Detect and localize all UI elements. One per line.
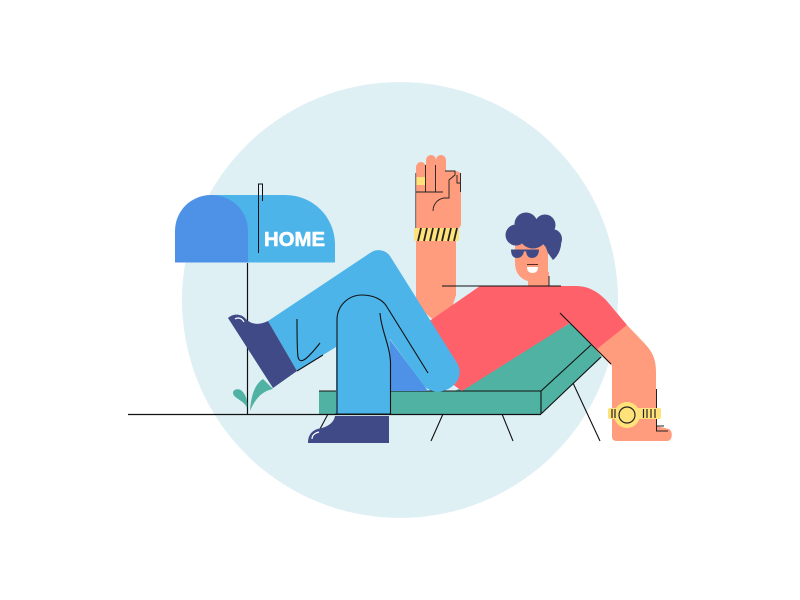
right lens [526, 250, 539, 258]
shoulder and chest lines [442, 286, 611, 364]
lounger legs [320, 383, 600, 441]
lounger side [541, 345, 602, 414]
lower shoe body [308, 416, 389, 443]
finger one [416, 162, 426, 192]
face [515, 244, 549, 281]
sunglasses [511, 250, 539, 258]
ground line [128, 414, 541, 416]
upper shoe body [228, 315, 297, 388]
wrist watch [608, 402, 661, 428]
mailbox body [211, 195, 335, 262]
lounger [319, 322, 602, 441]
mailbox door [175, 195, 248, 262]
hair [506, 212, 562, 260]
finger two [426, 155, 436, 185]
upper shoe highlight [235, 318, 244, 322]
plant [233, 379, 273, 411]
right arm skin [595, 325, 672, 441]
mailbox flag [258, 184, 262, 253]
mailbox label: HOME [264, 228, 325, 251]
lounger back surface [455, 322, 592, 391]
trousers [268, 250, 460, 414]
raised arm and hand [414, 155, 461, 330]
shirt [428, 286, 627, 391]
neck line [548, 276, 550, 286]
finger and thumb lines [416, 165, 460, 211]
mailbox [175, 184, 335, 414]
raised leg [268, 250, 460, 414]
bracelet [414, 228, 459, 241]
head [506, 212, 562, 286]
fold lines [297, 295, 428, 414]
ring [416, 177, 425, 185]
large leaf [250, 379, 273, 411]
mustache [527, 264, 538, 266]
mailbox post [246, 263, 248, 414]
hand lines [656, 389, 668, 431]
lounger outlines [319, 345, 601, 414]
shoe: lower foot [308, 416, 389, 443]
left lens [511, 250, 524, 258]
smile [527, 267, 538, 273]
arm and palm skin [416, 171, 461, 330]
leg overlap [337, 295, 390, 414]
neck [528, 272, 549, 286]
shoe: upper foot [228, 315, 297, 388]
left edge of hand [415, 173, 417, 240]
small leaf [233, 389, 247, 408]
lower arm and hand on right [595, 325, 672, 441]
lower shoe highlight [312, 432, 319, 439]
lounger front [319, 391, 541, 414]
background circle [182, 82, 618, 518]
inner leg shadow [390, 339, 428, 391]
bridge [523, 250, 527, 251]
finger three [436, 155, 446, 185]
